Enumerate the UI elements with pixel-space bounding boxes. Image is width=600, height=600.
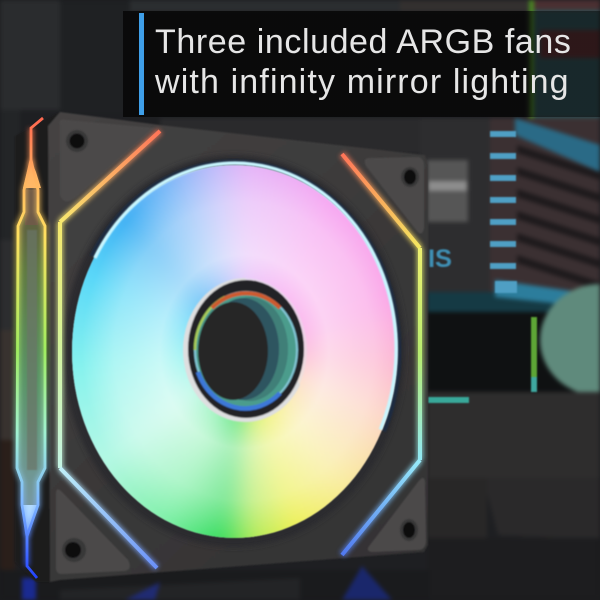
- title text: [155, 23, 571, 101]
- title banner: [123, 11, 600, 117]
- title text: with infinity mirror lighting: [155, 63, 570, 101]
- frame light strips: [60, 131, 420, 568]
- fan disc with rainbow lighting: [72, 165, 397, 538]
- screw holes: [62, 130, 419, 562]
- disc dark surround: [63, 155, 405, 547]
- corner pads: [56, 120, 426, 574]
- side light channel: [16, 118, 45, 578]
- background: light bars on the radiator and shelf: IS: [428, 245, 452, 273]
- disc rim: pale cyan ring: [95, 163, 396, 430]
- frame body: [15, 112, 428, 582]
- side panel: [15, 112, 60, 582]
- accent bar: [139, 13, 144, 115]
- disc rim: navy shadow: [92, 161, 399, 431]
- title text: Three included ARGB fans: [155, 23, 571, 61]
- frame light strips: glow: [60, 131, 420, 568]
